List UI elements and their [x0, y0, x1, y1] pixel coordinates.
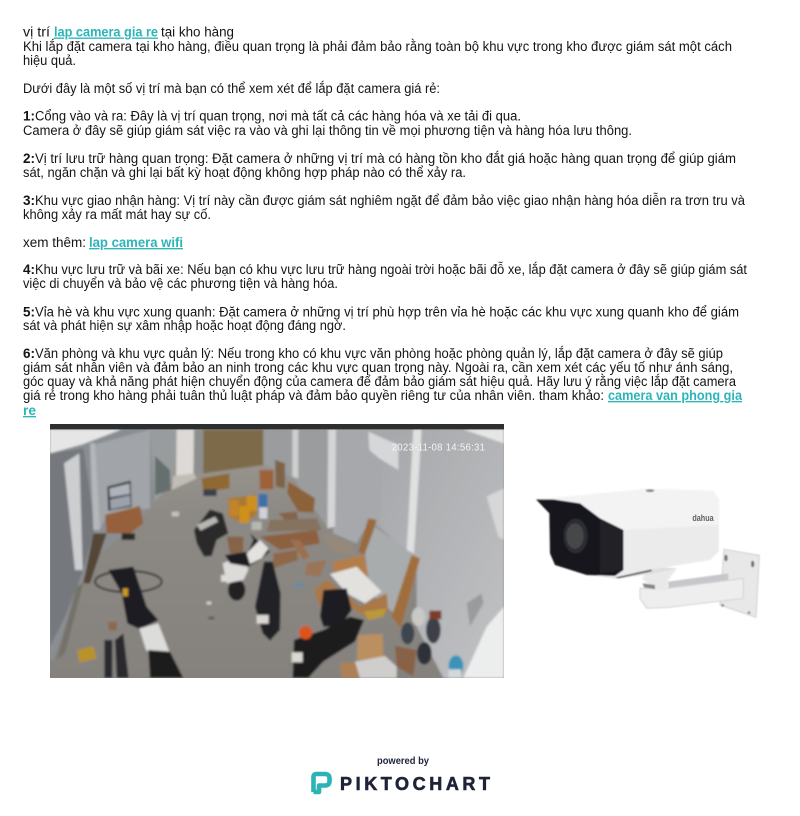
mount arm: [668, 573, 728, 588]
see also link: lap camera wifi: [89, 235, 183, 250]
item 1: 1:: [23, 108, 35, 124]
item 2: Vị trí lưu trữ hàng quan trọng: Đặt camera ở những vị trí mà có hàng tồn kho đắt giá hoặc hàng quan trọng để giúp giám: [35, 151, 736, 166]
bottom boxes: [357, 634, 383, 660]
paint buckets: [412, 607, 425, 626]
item 1: Camera ở đây sẽ giúp giám sát việc ra vào và ghi lại thông tin về mọi phương tiện và hàng hóa lưu thông.: [23, 123, 632, 138]
motorbike 2 white scooter: [228, 579, 245, 601]
back stacked boxes: [202, 473, 229, 492]
lens: [564, 519, 588, 553]
top screw: [646, 489, 654, 492]
item 2: sát, ngăn chặn và ghi lại bất kỳ hoạt động không hợp pháp nào có thể xảy ra.: [23, 165, 466, 180]
item 4: Khu vực lưu trữ và bãi xe: Nếu bạn có khu vực lưu trữ hàng ngoài trời hoặc bãi đỗ xe, lắp đặt camera ở đây sẽ giúp giám sát: [35, 262, 747, 277]
intro paragraph: Khi lắp đặt camera tại kho hàng, điều quan trọng là phải đảm bảo rằng toàn bộ khu vực trong kho được giám sát một cách: [23, 39, 732, 54]
item 3: 3:: [23, 193, 35, 208]
intro paragraph: [23, 39, 732, 68]
item 5: sát và phát hiện sự xâm nhập hoặc hoạt động đáng ngờ.: [23, 318, 346, 333]
item 2: [23, 151, 736, 180]
item 3: Khu vực giao nhận hàng: Vị trí này cần được giám sát nghiêm ngặt để đảm bảo việc giao nhận hàng hóa diễn ra trơn tru và: [35, 193, 746, 208]
item 6: góc quay và khả năng phát hiện chuyển động của camera để đảm bảo giám sát hiệu quả. Hãy lưu ý rằng việc lắp đặt camera: [23, 374, 737, 389]
item 6: camera van phong gia: [608, 388, 743, 403]
left motorbike: [95, 571, 162, 592]
powered by label: powered by: [377, 755, 429, 767]
heading line: tại kho hàng: [161, 24, 234, 40]
timestamp: 2023-11-08 14:56:31: [392, 442, 485, 453]
item 6: Văn phòng và khu vực quản lý: Nếu trong kho có khu vực văn phòng hoặc phòng quản lý, lắp đặt camera ở đây sẽ giúp: [35, 346, 723, 361]
item 5: Vỉa hè và khu vực xung quanh: Đặt camera ở những vị trí phù hợp trên vỉa hè hoặc các khu vực xung quanh kho để giám: [35, 304, 739, 320]
stair rail: [155, 456, 171, 495]
front black bezel: [536, 499, 623, 576]
water jug: [259, 494, 267, 507]
heading line: lap camera gia re: [54, 24, 158, 40]
Piktochart wordmark: PIKTOCHART: [340, 774, 490, 794]
item 2: 2:: [23, 151, 35, 166]
yellow jugs: [228, 495, 257, 523]
item 5: [23, 304, 739, 333]
housing body: [537, 489, 719, 577]
item 6: [23, 346, 743, 418]
brand label: dahua: [692, 513, 714, 523]
cardboard box: [333, 555, 368, 577]
motorbike 4 with helmet: [320, 588, 352, 627]
left wall: [47, 420, 155, 660]
motorbike 3: [255, 562, 281, 641]
camera toolbar: [50, 424, 504, 429]
see also link: [23, 235, 183, 250]
item 6: giá rẻ trong kho hàng phải tuân thủ luật pháp và đảm bảo quyền riêng tư của nhân viên. tham khảo:: [23, 388, 604, 403]
left bench: [105, 506, 143, 533]
icon: Piktochart logo mark: [314, 774, 330, 792]
item 1: [23, 108, 632, 138]
item 4: [23, 262, 747, 291]
item 4: việc di chuyển và bảo vệ các phương tiện và hàng hóa.: [23, 276, 338, 291]
tall framed panel: [358, 518, 377, 555]
icon: Dahua bullet camera: [536, 489, 759, 617]
footer: powered by Piktochart: [314, 755, 490, 794]
wall mount plate: [720, 549, 759, 617]
cardboard on floor: [260, 530, 320, 550]
item 4: 4:: [23, 262, 35, 277]
lead-in sentence: Dưới đây là một số vị trí mà bạn có thể xem xét để lắp đặt camera giá rẻ:: [23, 81, 440, 96]
floor debris: [172, 512, 179, 516]
intro paragraph: hiệu quả.: [23, 53, 76, 68]
item 5: 5:: [23, 304, 35, 320]
item 6: giám sát nhân viên và đảm bảo an ninh trong các khu vực quan trọng này. Ngoài ra, cần xem xét các yếu tố như ánh sáng,: [23, 360, 733, 375]
back wall: [194, 430, 204, 470]
floor: [47, 420, 510, 683]
item 3: không xảy ra mất mát hay sự cố.: [23, 207, 211, 222]
photo: warehouse CCTV view: [47, 420, 510, 683]
right walls: [332, 430, 412, 544]
doorway: [176, 429, 194, 476]
bright pillars: [407, 429, 422, 553]
mount neck: [642, 567, 677, 590]
motorbike 1: [194, 509, 228, 557]
item 3: [23, 193, 746, 222]
item 1: Cổng vào và ra: Đây là vị trí quan trọng, nơi mà tất cả các hàng hóa và xe tải đi qua.: [35, 108, 521, 124]
see also link: xem thêm:: [23, 235, 86, 250]
item 6: 6:: [23, 346, 35, 361]
heading line: [23, 24, 234, 40]
ladder, rails, tools: [83, 533, 107, 583]
window frame on left wall: [107, 481, 132, 511]
heading line: vị trí: [23, 24, 50, 40]
item 6: re: [23, 403, 36, 418]
